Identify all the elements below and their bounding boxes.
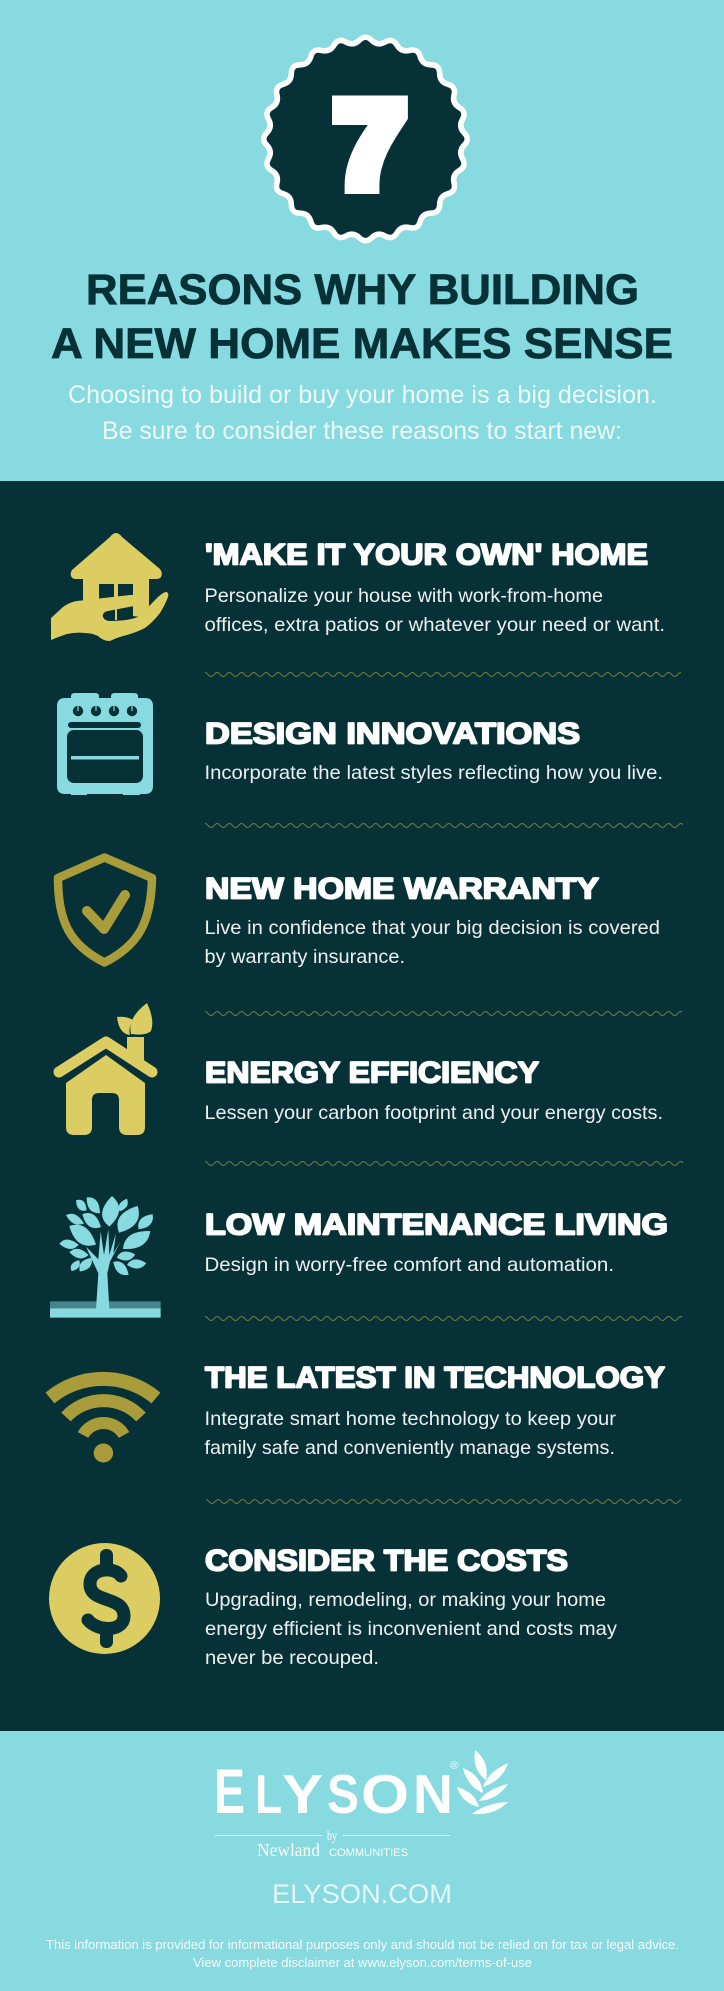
icon: shield with check [58,858,152,962]
reason 5 [50,1194,668,1318]
reason 6 [50,1362,665,1462]
panel: header [0,0,724,481]
description: Personalize your house with work-from-home [204,585,603,607]
reason 7 [49,1543,617,1669]
badge: number seven: 7 [335,78,405,212]
reason 2 [57,693,663,795]
intro text: Choosing to build or buy your home is a big decision. [68,381,657,409]
icon: dollar coin [49,1543,160,1654]
description: Upgrading, remodeling, or making your home [205,1589,606,1611]
description: Design in worry-free comfort and automation. [204,1254,614,1276]
heading: NEW HOME WARRANTY [205,872,599,906]
description: offices, extra patios or whatever your need or want. [204,614,665,636]
logo: Elyson: Y [282,1763,323,1825]
logo: Elyson: E [214,1757,245,1827]
description [205,1589,617,1669]
logo: Elyson: L [255,1763,282,1825]
disclaimer [46,1938,679,1970]
description: energy efficient is inconvenient and costs may [205,1618,617,1640]
icon: eco house [59,1003,152,1135]
logo: by Newland Communities: Newland [257,1840,320,1860]
intro text: Be sure to consider these reasons to start new: [102,417,622,445]
heading: 'MAKE IT YOUR OWN' HOME [205,538,648,572]
title: A NEW HOME MAKES SENSE [51,320,673,368]
intro text [68,381,657,445]
logo: by Newland Communities: by [327,1829,337,1844]
reason 3 [58,858,660,968]
description: never be recouped. [205,1647,379,1669]
description [204,585,665,636]
description: Lessen your carbon footprint and your energy costs. [204,1102,663,1124]
logo: by Newland Communities [215,1829,450,1860]
logo: Elyson: N [413,1763,453,1825]
logo: Elyson [214,1750,508,1827]
website: ELYSON.COM [272,1879,452,1909]
logo: Elyson: ® [450,1760,458,1772]
description [204,917,660,968]
reason 4 [59,1003,663,1135]
heading: CONSIDER THE COSTS [205,1544,568,1578]
logo: Elyson: O [361,1763,409,1825]
reason 1 [51,533,665,641]
description: family safe and conveniently manage systems. [204,1437,615,1459]
badge: number seven [264,37,467,241]
title [51,266,673,368]
icon: oven [57,693,153,795]
description [204,1408,617,1459]
logo: Elyson: S [327,1763,359,1825]
heading: LOW MAINTENANCE LIVING [205,1208,668,1242]
heading: DESIGN INNOVATIONS [205,718,580,750]
disclaimer: View complete disclaimer at www.elyson.com/terms-of-use [193,1956,532,1970]
description: Live in confidence that your big decision is covered [204,917,660,939]
icon: leaves [457,1750,508,1814]
panel: reasons [0,481,724,1731]
description: Integrate smart home technology to keep your [204,1408,617,1430]
heading: THE LATEST IN TECHNOLOGY [205,1362,665,1394]
logo: by Newland Communities: COMMUNITIES [329,1847,408,1859]
disclaimer: This information is provided for informational purposes only and should not be relied on for tax or legal advice. [46,1938,679,1952]
title: REASONS WHY BUILDING [86,266,639,314]
panel: footer [0,1731,724,1991]
heading: ENERGY EFFICIENCY [205,1056,539,1090]
icon: tree with hand [50,1194,161,1318]
icon: house in hand [51,533,168,641]
description: Incorporate the latest styles reflecting how you live. [204,762,663,784]
description: by warranty insurance. [204,946,405,968]
icon: wifi [50,1379,156,1462]
